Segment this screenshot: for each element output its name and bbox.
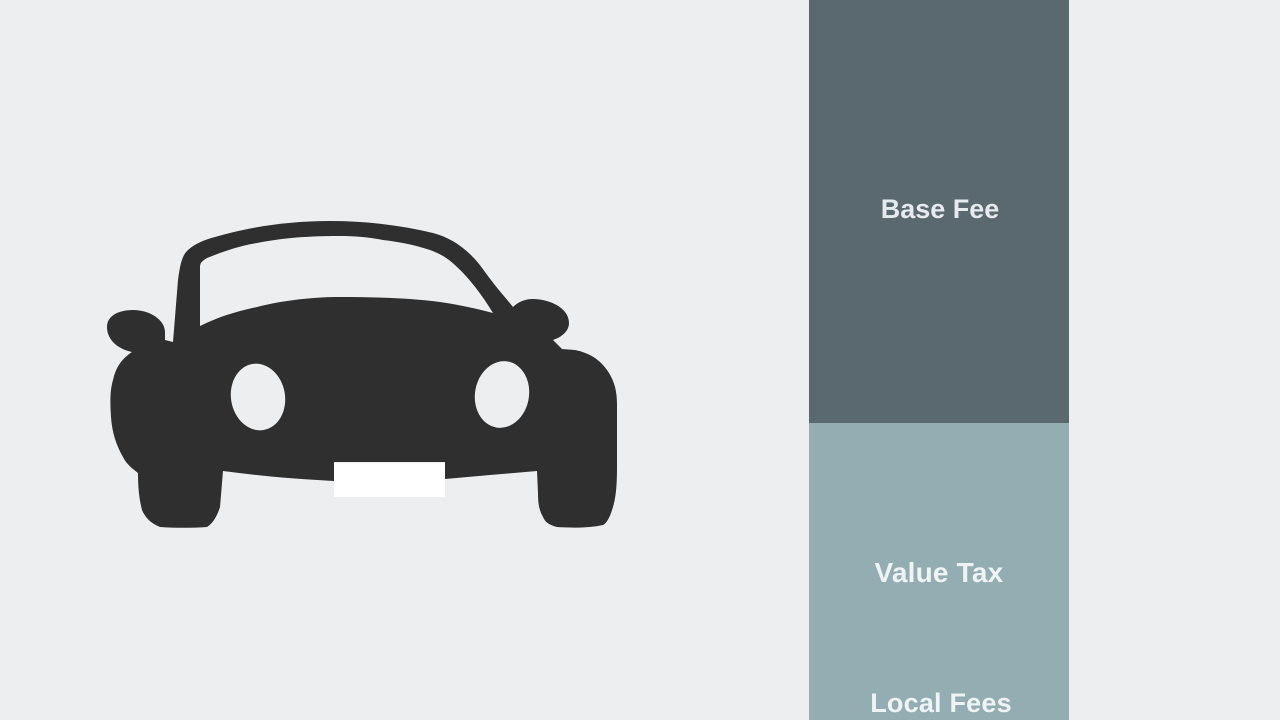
segment: value tax and local fees bbox=[809, 423, 1069, 720]
left headlight bbox=[226, 359, 290, 435]
stacked fee bar bbox=[809, 0, 1069, 720]
label: value tax: Value Tax bbox=[875, 557, 1004, 588]
license plate bbox=[334, 463, 445, 497]
right headlight bbox=[470, 357, 534, 432]
segment: base fee bbox=[809, 0, 1069, 423]
icon: car front view bbox=[107, 221, 617, 528]
car body silhouette bbox=[107, 221, 617, 528]
label: base fee: Base Fee bbox=[881, 194, 999, 224]
label: local fees: Local Fees bbox=[870, 688, 1012, 718]
